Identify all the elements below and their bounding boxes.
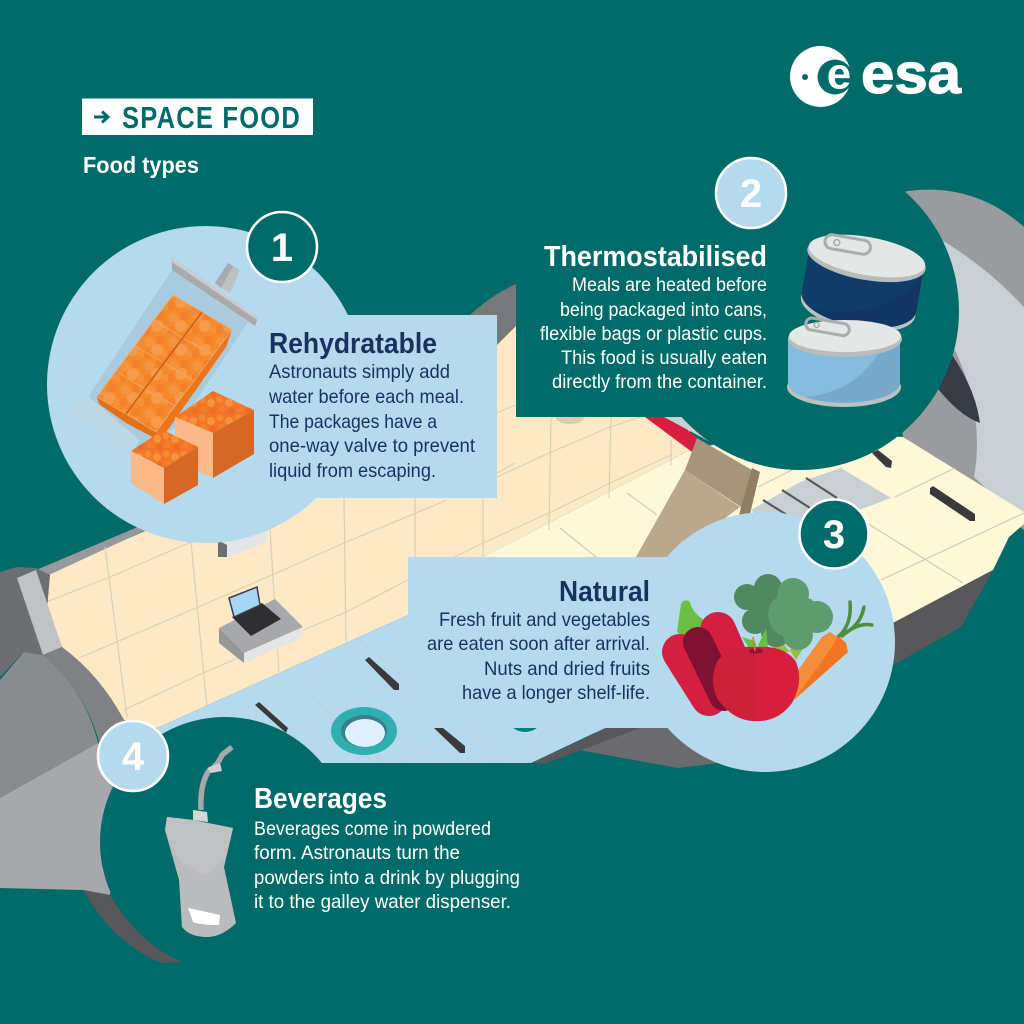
- logo: esa: esa: [861, 42, 962, 106]
- subtitle: Food types: [83, 152, 199, 178]
- heading: Natural: Natural: [559, 576, 650, 608]
- underside of floor, centre: [531, 728, 740, 768]
- text: thermostabilised description: directly from the container.: [552, 371, 767, 393]
- panel 1: rehydratable: [47, 212, 497, 543]
- text: beverages description: it to the galley water dispenser.: [254, 891, 511, 913]
- blue floor: [157, 615, 607, 763]
- badge 2: 2: [740, 172, 762, 216]
- plate under panel: [508, 704, 542, 732]
- heading: Thermostabilised: Thermostabilised: [544, 241, 767, 273]
- wall tile grid: [46, 405, 671, 717]
- text: thermostabilised description: [540, 274, 767, 393]
- text: beverages description: [254, 818, 520, 913]
- panel 2 background: [516, 152, 959, 470]
- red and grey wall rack: [645, 417, 760, 462]
- text: rehydratable description: The packages have a: [269, 411, 437, 433]
- text: rehydratable description: [268, 361, 476, 482]
- text: rehydratable description: Astronauts simply add: [269, 361, 450, 383]
- badge 3: [800, 500, 868, 568]
- icon: beverage pouch: [165, 747, 236, 937]
- panel 3 background: [408, 512, 895, 772]
- far module dome, upper left: [460, 284, 516, 348]
- left hub: [0, 567, 182, 963]
- laptop on desk: [219, 587, 303, 663]
- title bar: SPACE FOOD: [122, 100, 301, 135]
- text: thermostabilised description: This food is usually eaten: [561, 347, 767, 369]
- far module dome, right: [870, 190, 1024, 530]
- badge 1: 1: [271, 226, 293, 270]
- right floor handles: [872, 450, 975, 521]
- text: thermostabilised description: Meals are heated before: [572, 274, 767, 296]
- panel 2: thermostabilised: [516, 152, 959, 470]
- badge 4: [98, 721, 168, 791]
- panel 4 background: [100, 717, 531, 1024]
- heading: Beverages: Beverages: [254, 783, 387, 815]
- icon: arrow: [94, 112, 108, 122]
- badge 4: 4: [122, 735, 145, 779]
- blue floor grid: [210, 638, 498, 763]
- icon: rehydratable food bag: [67, 257, 259, 504]
- icon: food cans: [787, 227, 929, 407]
- logo: esa: [790, 42, 962, 107]
- tan duct: [636, 438, 760, 560]
- scene: space station interior: [0, 190, 1024, 963]
- text: natural description: [427, 609, 650, 704]
- grey floor strip: [751, 468, 891, 540]
- plate: [331, 707, 397, 755]
- wall shelf: [218, 527, 267, 557]
- panel 1 background: [47, 226, 497, 543]
- panel 3: natural: [408, 500, 895, 772]
- text: thermostabilised description: flexible bags or plastic cups.: [540, 323, 767, 345]
- text: natural description: Fresh fruit and vegetables: [439, 609, 650, 631]
- floor handles: [255, 657, 465, 753]
- icon: fruit and vegetables: [677, 574, 872, 721]
- panel 4: beverages: [98, 717, 531, 1024]
- text: natural description: have a longer shelf-life.: [462, 682, 650, 704]
- underside of floor, right: [820, 570, 993, 700]
- wall cup: [556, 412, 584, 424]
- text: rehydratable description: one-way valve to prevent: [269, 435, 476, 457]
- heading: Rehydratable: Rehydratable: [269, 328, 437, 360]
- text: natural description: are eaten soon after arrival.: [427, 633, 650, 655]
- cream floor grid: [560, 468, 1024, 583]
- logo: esa: e: [827, 50, 851, 98]
- text: thermostabilised description: being packaged into cans,: [560, 299, 767, 321]
- text: rehydratable description: water before each meal.: [268, 386, 464, 408]
- cream floor: [408, 430, 1024, 727]
- wall panels: [37, 300, 690, 728]
- wall top edge: [36, 526, 146, 580]
- text: beverages description: powders into a drink by plugging: [254, 867, 520, 889]
- text: beverages description: form. Astronauts turn the: [254, 842, 460, 864]
- badge 2: [716, 158, 786, 228]
- badge 3: 3: [823, 513, 845, 557]
- text: rehydratable description: liquid from escaping.: [269, 460, 436, 482]
- text: beverages description: Beverages come in powdered: [254, 818, 491, 840]
- text: natural description: Nuts and dried fruits: [484, 658, 650, 680]
- badge 1: [247, 212, 317, 282]
